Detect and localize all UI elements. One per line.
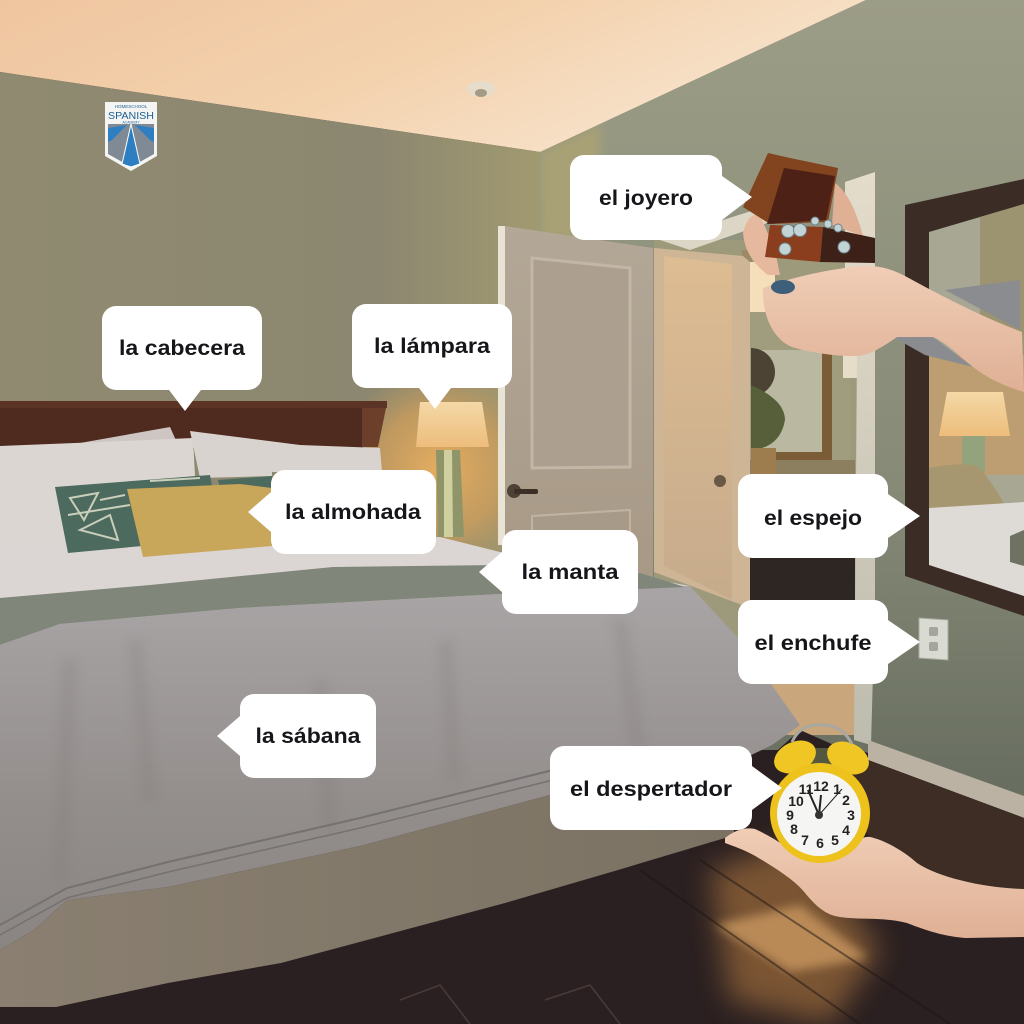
clock numerals: 11	[799, 781, 814, 797]
label: el joyero: el joyero	[599, 187, 693, 210]
logo: HOMESCHOOL	[115, 104, 148, 109]
mattress top	[0, 537, 690, 645]
jewels	[779, 217, 850, 255]
logo text: SPANISH	[108, 111, 154, 122]
door frame right	[845, 172, 875, 745]
clock hands	[808, 789, 842, 815]
outlet	[919, 618, 948, 660]
room beyond doorway	[654, 205, 859, 735]
back pillows	[0, 427, 382, 543]
clock numerals: 12	[813, 778, 829, 794]
hand with jewelry box	[743, 153, 1024, 392]
yellow cushion	[127, 484, 272, 557]
mirror lamp	[939, 392, 1010, 472]
sleeve	[893, 280, 1020, 367]
label: la almohada	[248, 470, 436, 554]
label: el enchufe: el enchufe	[754, 632, 872, 655]
back finger	[832, 183, 863, 236]
clock numerals: 2	[842, 792, 850, 808]
label: la manta: la manta	[522, 561, 619, 584]
duvet	[0, 586, 800, 950]
clock numerals: 8	[790, 821, 798, 837]
hand and arm	[763, 266, 1024, 392]
main door	[498, 226, 653, 578]
label: la almohada: la almohada	[285, 501, 421, 524]
label: la cabecera: la cabecera	[119, 337, 245, 360]
label: el espejo: el espejo	[764, 507, 862, 530]
clock bells	[769, 734, 821, 780]
label: el enchufe	[738, 600, 920, 684]
label: la cabecera	[102, 306, 262, 411]
box lid	[743, 153, 838, 224]
label: la sábana: la sábana	[256, 725, 361, 748]
label: la sábana	[217, 694, 376, 778]
bed skirt	[0, 770, 735, 1007]
clock numerals: 1	[833, 781, 841, 797]
clock numerals: 10	[788, 793, 804, 809]
label: la lámpara	[352, 304, 512, 409]
patterned cushion	[55, 475, 272, 553]
hand with alarm clock	[725, 725, 1024, 938]
clock numerals: 6	[816, 835, 824, 851]
warm wall strip above door	[540, 124, 600, 240]
label: la lámpara: la lámpara	[374, 335, 490, 358]
label: la manta	[479, 530, 638, 614]
clock numerals: 9	[786, 807, 794, 823]
clock numerals	[786, 778, 855, 851]
smoke detector	[467, 81, 495, 97]
right wall	[540, 0, 1024, 810]
label: el despertador	[550, 746, 782, 830]
nail	[771, 280, 795, 294]
label: el espejo	[738, 474, 920, 558]
clock numerals: 5	[831, 832, 839, 848]
clock body	[770, 763, 870, 863]
inner door	[654, 248, 750, 608]
lamp	[416, 402, 489, 537]
label: el joyero	[570, 155, 752, 240]
blanket	[0, 565, 685, 645]
ceiling	[0, 0, 866, 152]
clock numerals: 4	[842, 822, 850, 838]
clock back	[805, 748, 835, 768]
clock handle	[792, 725, 852, 744]
headboard	[0, 401, 387, 450]
label: el despertador: el despertador	[570, 778, 732, 801]
baseboard	[868, 740, 1024, 818]
mirror pillow	[929, 464, 1006, 510]
left finger	[743, 215, 780, 275]
door handle	[507, 484, 538, 498]
bathroom decor: round mirror and plant	[751, 348, 785, 474]
clock numerals: 7	[801, 832, 809, 848]
floor	[0, 730, 1024, 1024]
wall mirror	[905, 179, 1024, 616]
logo	[105, 102, 157, 171]
box base	[765, 225, 823, 262]
clock numerals: 3	[847, 807, 855, 823]
left wall	[0, 72, 545, 575]
logo: ACADEMY	[122, 120, 140, 124]
